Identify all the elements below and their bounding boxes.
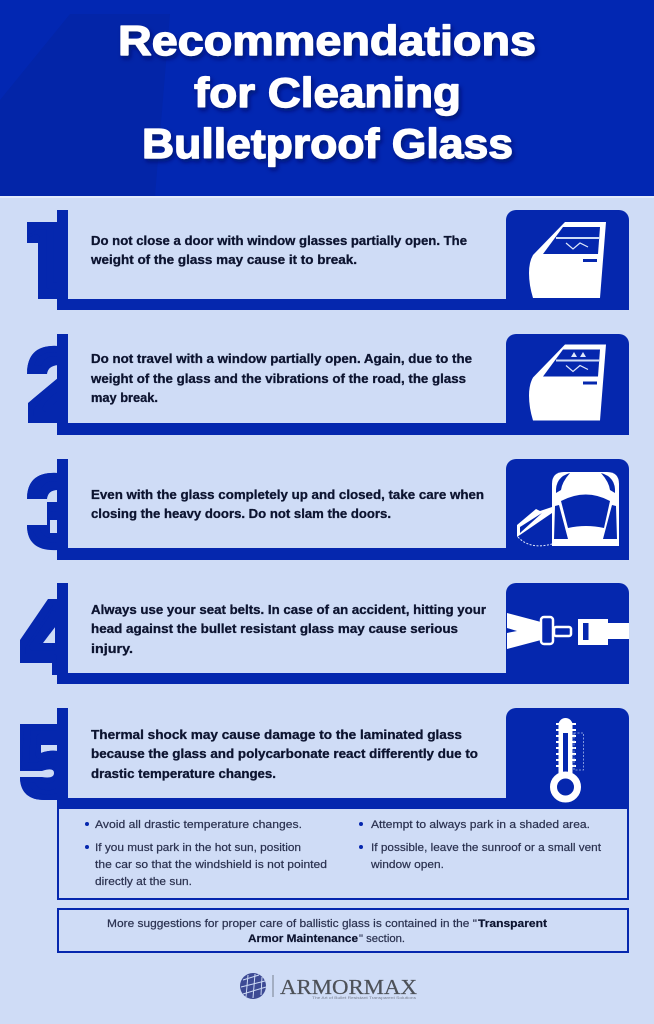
card frame xyxy=(57,583,629,684)
tips: right column: window open. xyxy=(370,859,444,871)
number 4 xyxy=(20,599,57,675)
panel: step 3 xyxy=(27,459,629,560)
number 5: 5 xyxy=(20,705,77,819)
card frame xyxy=(57,210,629,310)
note box: Armor Maintenance xyxy=(248,933,358,945)
logo: Armormax: ARMORMAX xyxy=(280,975,417,999)
tips: right column: If possible, leave the sunroof or a small vent xyxy=(371,842,601,854)
tips: left column: directly at the sun. xyxy=(95,876,192,888)
title: Recommendations xyxy=(118,17,536,64)
tips: right column: Attempt to always park in a shaded area. xyxy=(371,819,590,831)
step text: drastic temperature changes. xyxy=(91,766,276,781)
note box: Transparent xyxy=(478,918,547,930)
number 1 xyxy=(27,222,57,299)
step text xyxy=(91,602,486,656)
step text: Always use your seat belts. In case of an accident, hitting your xyxy=(91,602,486,617)
card frame xyxy=(57,708,629,809)
step text: weight of the glass may cause it to break. xyxy=(90,252,357,267)
number 3: 3 xyxy=(26,453,83,567)
number 5 xyxy=(20,724,57,800)
number 2 xyxy=(27,346,57,423)
step text: closing the heavy doors. Do not slam the doors. xyxy=(91,506,391,521)
step text: head against the bullet resistant glass may cause serious xyxy=(91,621,458,636)
panel: step 4 xyxy=(20,583,629,684)
step text: Do not close a door with window glasses partially open. The xyxy=(91,233,467,248)
number 2: 2 xyxy=(26,328,83,442)
step text: injury. xyxy=(91,641,133,656)
title: Bulletproof Glass xyxy=(142,120,513,167)
icon: thermometer xyxy=(554,718,584,799)
title: for Cleaning xyxy=(194,69,461,116)
icon: car door window moving xyxy=(529,344,606,420)
step text: may break. xyxy=(91,390,158,405)
step text xyxy=(91,487,484,521)
note box: More suggestions for proper care of ballistic glass is contained in the " xyxy=(107,918,477,930)
tips: right column xyxy=(359,819,601,871)
icon: car door window partly open xyxy=(529,222,606,298)
tips box xyxy=(58,808,628,899)
logo: Armormax xyxy=(240,973,417,1000)
icon: globe xyxy=(240,973,266,999)
tips: left column: If you must park in the hot sun, position xyxy=(95,842,301,854)
step text xyxy=(90,233,467,267)
note box xyxy=(58,909,628,952)
title xyxy=(118,17,536,167)
icon: seat belt and buckle xyxy=(507,613,629,649)
number 1: 1 xyxy=(12,204,69,318)
step text: weight of the glass and the vibrations of the road, the glass xyxy=(90,371,466,386)
panel: step 2 xyxy=(27,334,629,435)
step text: Do not travel with a window partially open. Again, due to the xyxy=(91,351,472,366)
step text: because the glass and polycarbonate react differently due to xyxy=(91,746,478,761)
panel: step 1 xyxy=(27,210,629,310)
tips: left column: the car so that the windshield is not pointed xyxy=(95,859,327,871)
icon: car top view with open door xyxy=(517,472,619,546)
header banner xyxy=(0,0,654,198)
number 3 xyxy=(27,472,57,550)
logo: Armormax: The Art of Bullet Resistant Transparent Solutions xyxy=(312,996,416,1000)
tips: left column xyxy=(85,819,327,888)
step text: Thermal shock may cause damage to the laminated glass xyxy=(91,727,462,742)
step text: Even with the glass completely up and closed, take care when xyxy=(91,487,484,502)
note box: " section. xyxy=(359,933,405,945)
card frame xyxy=(57,459,629,560)
number 4: 4 xyxy=(20,580,77,694)
step text xyxy=(90,351,472,405)
step text xyxy=(91,727,478,781)
card frame xyxy=(57,334,629,435)
panel: step 5 xyxy=(15,705,629,899)
tips: left column: Avoid all drastic temperature changes. xyxy=(95,819,302,831)
